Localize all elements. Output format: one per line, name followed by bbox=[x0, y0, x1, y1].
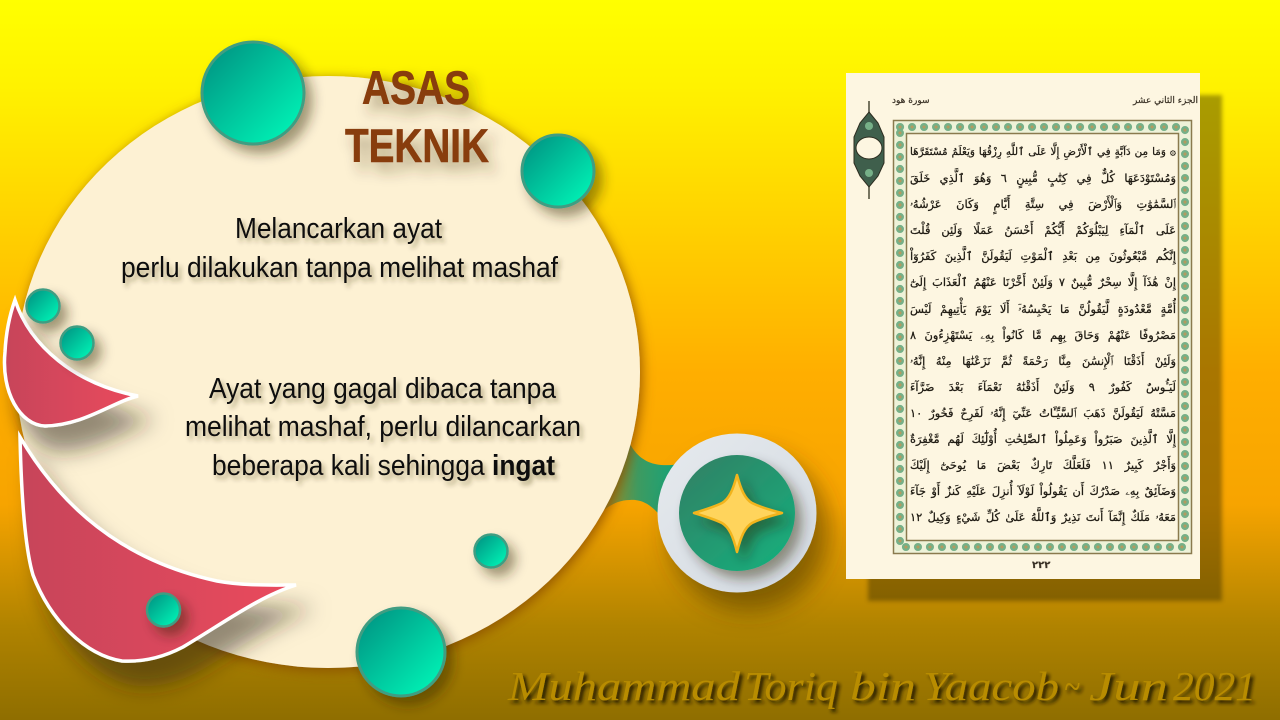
author signature: Yaacob bbox=[923, 663, 1059, 709]
verses: وَمُسْتَوْدَعَهَا كُلٌّ فِي كِتَٰبٍ مُّبِينٍ ٦ وَهُوَ ٱلَّذِي خَلَقَ bbox=[910, 171, 1176, 185]
text block: first point: perlu dilakukan tanpa melihat mashaf bbox=[121, 252, 559, 284]
author signature: bin bbox=[850, 663, 916, 709]
verses: لَيَـُٔوسٌ كَفُورٌ ٩ وَلَئِنْ أَذَقْنَٰهُ نَعْمَآءَ بَعْدَ ضَرَّآءَ bbox=[910, 380, 1176, 394]
decorative teal circle: small lower bbox=[60, 326, 94, 360]
text block: second point: melihat mashaf, perlu dilancarkan bbox=[185, 411, 581, 443]
author signature: ~ bbox=[1064, 663, 1080, 709]
author signature: Muhammad bbox=[507, 663, 741, 709]
verses: إِنْ هَٰذَآ إِلَّا سِحْرٌ مُّبِينٌ ٧ وَلَئِنْ أَخَّرْنَا عَنْهُمُ ٱلْعَذَابَ إِلَىٰٓ bbox=[910, 275, 1176, 289]
panel: Quran page bbox=[846, 73, 1200, 579]
author signature: 2021 bbox=[1173, 663, 1256, 709]
verses: عَلَى ٱلْمَآءِ لِيَبْلُوَكُمْ أَيُّكُمْ أَحْسَنُ عَمَلًا وَلَئِن قُلْتَ bbox=[910, 223, 1176, 237]
verses: أُمَّةٍ مَّعْدُودَةٍ لَّيَقُولُنَّ مَا يَحْبِسُهُۥٓ أَلَا يَوْمَ يَأْتِيهِمْ لَيْسَ bbox=[910, 302, 1176, 316]
verses: وَلَئِنْ أَذَقْنَا ٱلْإِنسَٰنَ مِنَّا رَحْمَةً ثُمَّ نَزَعْنَٰهَا مِنْهُ إِنَّهُۥ bbox=[910, 354, 1176, 368]
text block: second point bbox=[185, 373, 581, 482]
text block: second point: Ayat yang gagal dibaca tanpa bbox=[209, 373, 557, 405]
page header: juz: الجزء الثاني عشر bbox=[1133, 96, 1198, 106]
red swoosh: large bbox=[20, 437, 296, 661]
decorative teal circle: on red swoosh bbox=[147, 594, 180, 626]
text block: second point: beberapa kali sehingga ingat bbox=[212, 450, 555, 482]
verses: وَأَجْرٌ كَبِيرٌ ١١ فَلَعَلَّكَ تَارِكٌ بَعْضَ مَا يُوحَىٰٓ إِلَيْكَ bbox=[910, 458, 1176, 472]
main cream circle panel bbox=[16, 76, 640, 668]
title bbox=[345, 61, 489, 172]
title: ASAS bbox=[362, 61, 470, 114]
title: TEKNIK bbox=[345, 119, 489, 172]
author signature bbox=[507, 663, 1256, 709]
badge with star icon bbox=[658, 434, 816, 592]
decorative teal circle: lower right bbox=[474, 534, 508, 568]
verses: ٱلسَّمَٰوَٰتِ وَٱلْأَرْضَ فِي سِتَّةِ أَيَّامٍ وَكَانَ عَرْشُهُۥ bbox=[910, 197, 1176, 211]
connector between main circle and badge bbox=[604, 444, 680, 518]
page number: ٢٢٢ bbox=[1032, 560, 1050, 571]
verses: مَسَّتْهُ لَيَقُولَنَّ ذَهَبَ ٱلسَّيِّـَٔاتُ عَنِّيٓ إِنَّهُۥ لَفَرِحٌ فَخُورٌ ١٠ bbox=[910, 406, 1176, 420]
verses: ۞ وَمَا مِن دَآبَّةٍ فِي ٱلْأَرْضِ إِلَّا عَلَى ٱللَّهِ رِزْقُهَا وَيَعْلَمُ مُسْتَقَرَّهَا bbox=[910, 146, 1176, 158]
verses: مَصْرُوفًا عَنْهُمْ وَحَاقَ بِهِم مَّا كَانُواْ بِهِۦ يَسْتَهْزِءُونَ ٨ bbox=[910, 328, 1176, 342]
author signature: Jun bbox=[1089, 663, 1168, 709]
page border ornament bbox=[854, 101, 1192, 554]
author signature: Toriq bbox=[744, 663, 838, 709]
verses: إِلَّا ٱلَّذِينَ صَبَرُواْ وَعَمِلُواْ ٱلصَّٰلِحَٰتِ أُوْلَٰٓئِكَ لَهُم مَّغْفِرَةٌ bbox=[910, 432, 1176, 446]
text block: first point bbox=[121, 213, 559, 284]
verses: مَعَهُۥ مَلَكٌ إِنَّمَآ أَنتَ نَذِيرٌ وَٱللَّهُ عَلَىٰ كُلِّ شَيْءٍ وَكِيلٌ ١٢ bbox=[910, 510, 1176, 524]
page header: surah name: سورة هود bbox=[892, 96, 930, 106]
decorative teal circle: bottom bbox=[357, 608, 445, 696]
verses: وَضَآئِقٌ بِهِۦ صَدْرُكَ أَن يَقُولُواْ لَوْلَآ أُنزِلَ عَلَيْهِ كَنزٌ أَوْ جَآءَ bbox=[910, 484, 1176, 498]
red swoosh: small bbox=[4, 300, 138, 426]
verses bbox=[910, 142, 1176, 526]
text block: first point: Melancarkan ayat bbox=[235, 213, 442, 245]
verses: إِنَّكُم مَّبْعُوثُونَ مِن بَعْدِ ٱلْمَوْتِ لَيَقُولَنَّ ٱلَّذِينَ كَفَرُوٓاْ bbox=[910, 249, 1176, 263]
decorative teal circle: top left bbox=[202, 42, 304, 144]
decorative teal circle: small upper bbox=[26, 290, 60, 322]
decorative teal circle: top right bbox=[522, 135, 594, 207]
